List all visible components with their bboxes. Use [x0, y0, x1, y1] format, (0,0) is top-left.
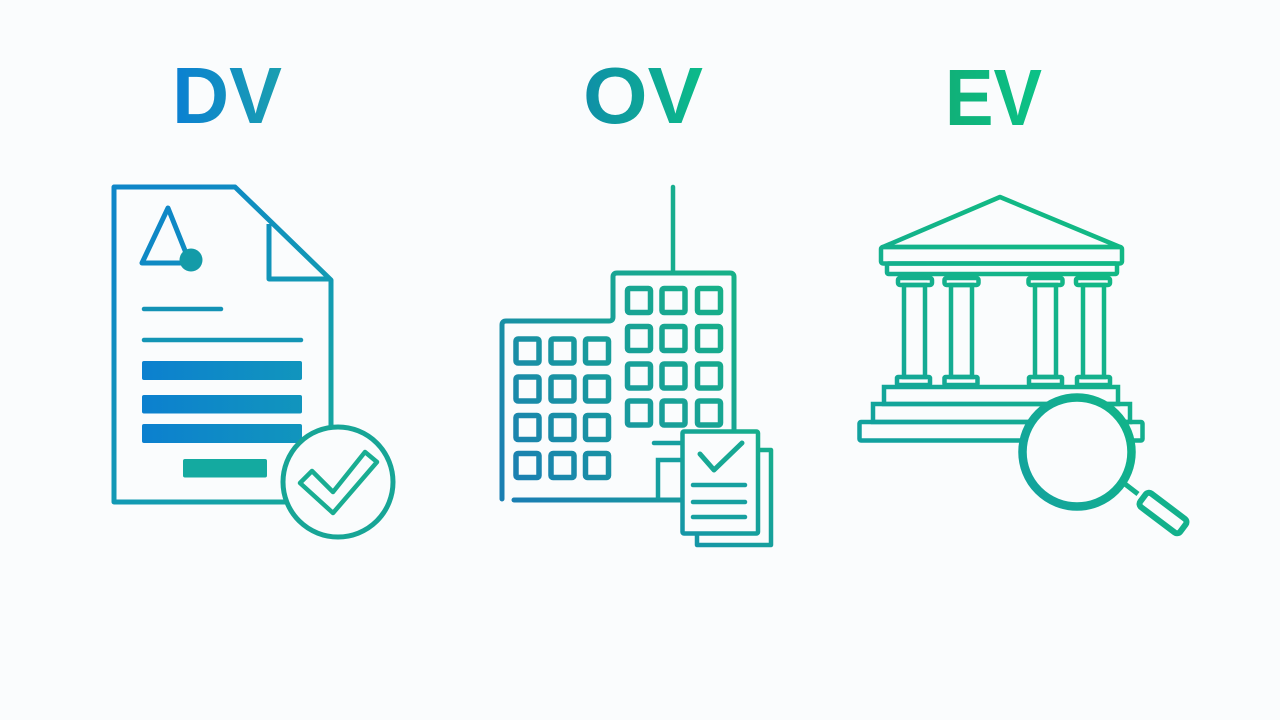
text bar 3	[142, 424, 302, 443]
heading: OV: OV	[583, 51, 703, 140]
icon: DV document with check badge	[114, 187, 393, 537]
door canopy	[654, 441, 684, 445]
document outline	[114, 187, 331, 502]
top step	[884, 387, 1118, 404]
check mark outline	[300, 452, 377, 513]
magnifying glass neck	[1125, 484, 1138, 494]
column 4	[1076, 278, 1110, 385]
icon: EV institution with magnifying glass	[860, 197, 1188, 535]
document line 1	[693, 483, 745, 487]
document line 3	[693, 515, 745, 519]
building outline	[502, 273, 734, 499]
antenna	[671, 187, 675, 272]
magnifying glass lens	[1022, 398, 1132, 506]
column 2	[944, 278, 978, 385]
logo dot	[180, 248, 202, 272]
pediment	[883, 197, 1120, 247]
folded corner	[269, 224, 331, 279]
heading: EV: EV	[945, 53, 1042, 142]
door	[658, 460, 684, 499]
text bar 2	[142, 395, 302, 414]
long text line	[144, 338, 301, 342]
icon: OV office building with documents	[502, 187, 771, 545]
cornice	[881, 247, 1122, 264]
check mark	[700, 443, 742, 470]
short text line	[144, 307, 221, 311]
text bar 1	[142, 361, 302, 380]
bottom step	[860, 422, 1142, 440]
middle step	[873, 404, 1130, 422]
document line 2	[693, 500, 745, 504]
right windows	[628, 288, 720, 425]
magnifying glass handle	[1138, 491, 1188, 535]
left windows	[516, 339, 608, 478]
entablature	[887, 264, 1117, 274]
back document	[697, 450, 771, 545]
heading: DV: DV	[172, 51, 282, 140]
check badge circle	[283, 427, 393, 537]
column 3	[1028, 278, 1062, 385]
ground line	[514, 498, 684, 502]
front document	[682, 432, 758, 534]
logo triangle	[142, 208, 190, 263]
column 1	[897, 278, 932, 385]
small action bar	[183, 459, 267, 478]
